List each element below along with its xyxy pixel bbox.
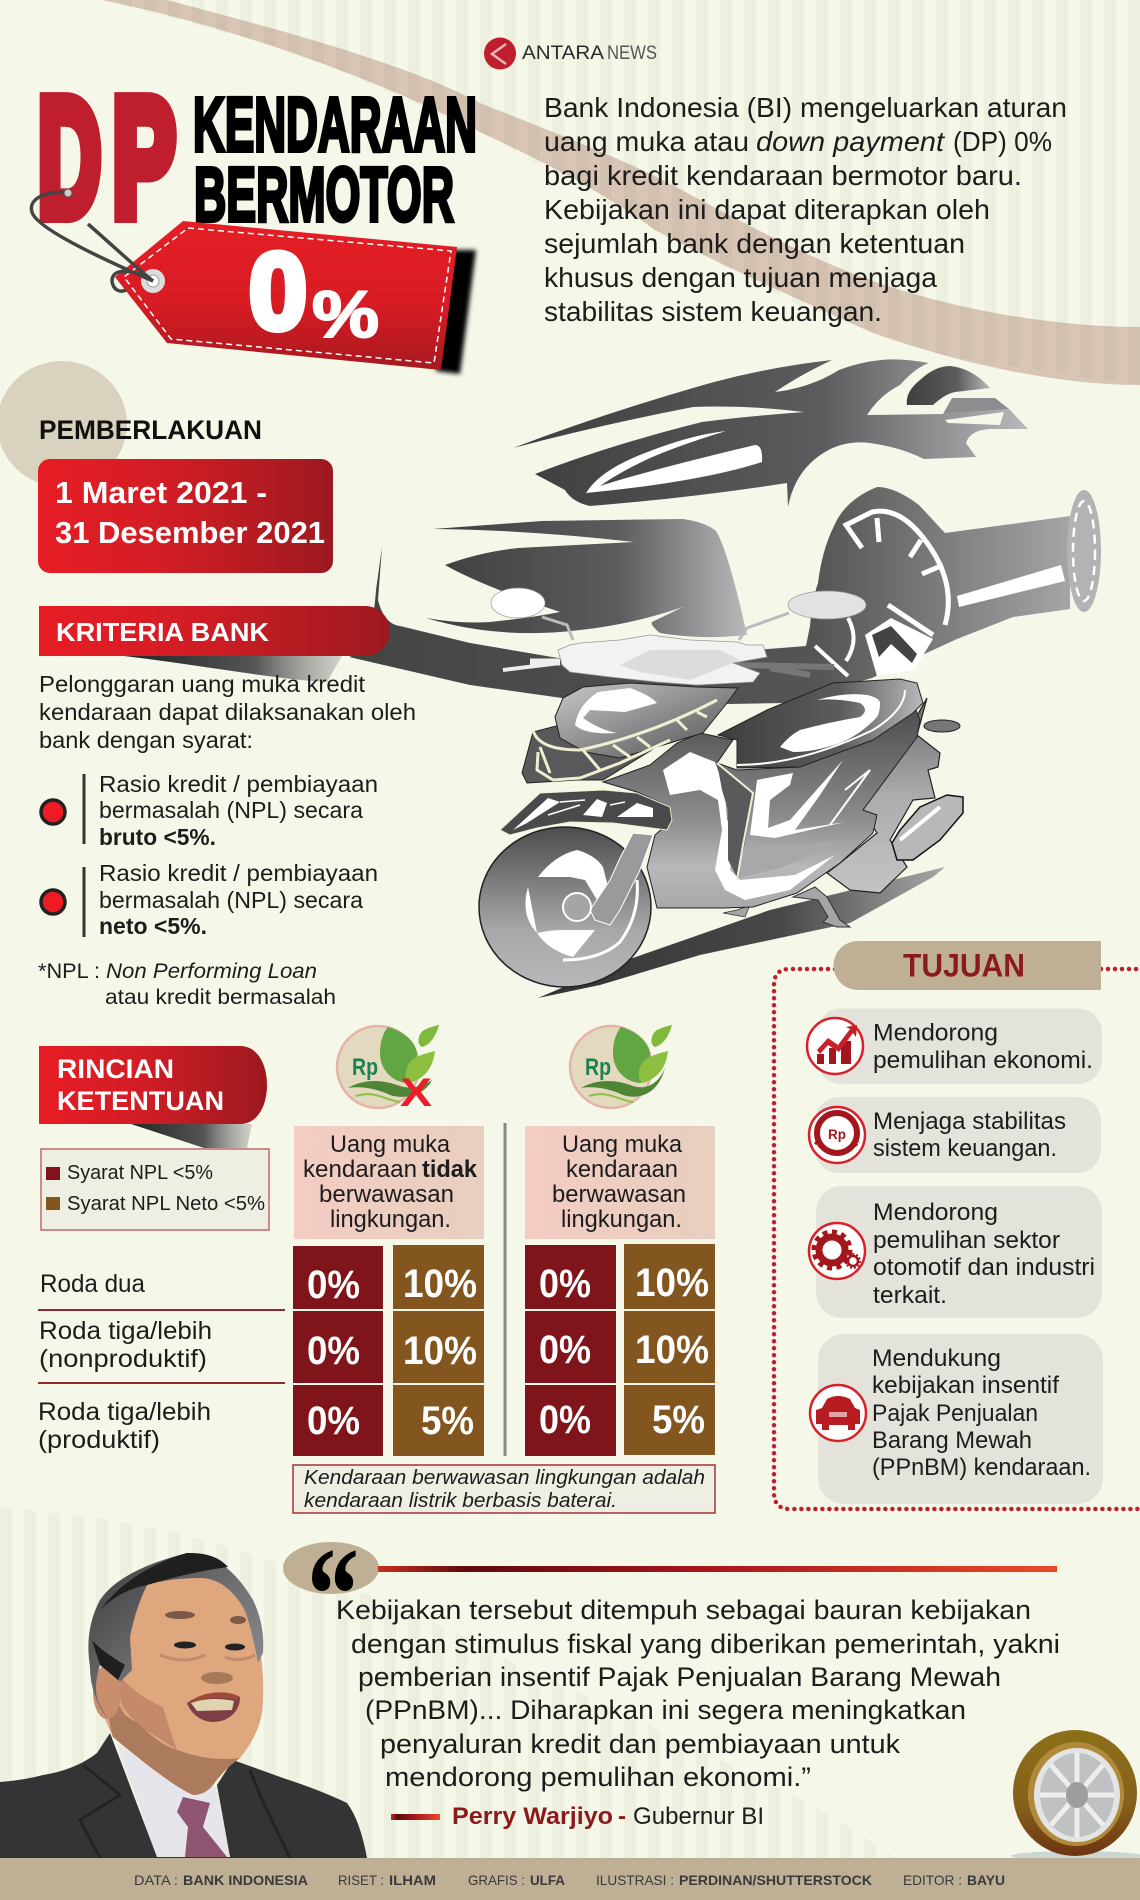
heading: pemberlakuan: PEMBERLAKUAN — [39, 415, 262, 445]
heading: rincian ketentuan: RINCIAN — [57, 1054, 174, 1084]
intro text: Bank Indonesia (BI) mengeluarkan aturan — [544, 92, 1067, 123]
column header: berwawasan lingkungan — [525, 1126, 715, 1239]
legend: Syarat NPL <5% — [67, 1162, 213, 1184]
criterion: neto: Rasio kredit / pembiayaan — [99, 860, 378, 886]
heading: tujuan: TUJUAN — [903, 948, 1025, 984]
data table: eco-friendly: 0% — [539, 1262, 591, 1306]
title: BERMOTOR — [194, 152, 454, 238]
row label: roda tiga produktif: (produktif) — [38, 1426, 160, 1454]
goal: sektor otomotif: otomotif dan industri — [873, 1254, 1095, 1281]
stand — [723, 887, 850, 927]
goal: stabilitas keuangan: Rp — [828, 1126, 846, 1142]
date panel: 31 Desember 2021 — [55, 515, 325, 550]
column header: berwawasan lingkungan: kendaraan — [566, 1156, 678, 1183]
date panel — [38, 459, 333, 573]
data table: not eco-friendly: 0% — [307, 1399, 360, 1443]
footer credits: ILHAM — [389, 1872, 436, 1888]
footnote NPL: *NPL : — [38, 960, 100, 983]
quote text — [336, 1595, 1060, 1792]
goal: insentif PPnBM: (PPnBM) kendaraan. — [872, 1454, 1091, 1481]
intro paragraph — [39, 671, 416, 753]
data table: eco-friendly: 10% — [635, 1261, 709, 1305]
panel: tujuan — [774, 941, 1140, 1509]
handlebar — [491, 588, 866, 685]
attribution — [391, 1803, 764, 1830]
intro text: stabilitas sistem keuangan. — [544, 296, 882, 327]
price tag 0%: 0 — [249, 230, 307, 352]
column header: berwawasan lingkungan: lingkungan. — [561, 1206, 682, 1233]
data table: not eco-friendly: 0% — [307, 1329, 360, 1373]
panel: kriteria bank — [38, 606, 416, 1009]
data table: eco-friendly: 5% — [652, 1398, 705, 1442]
goal: pemulihan ekonomi: pemulihan ekonomi. — [873, 1047, 1093, 1074]
title — [38, 65, 477, 251]
column header: tidak berwawasan lingkungan: berwawasan — [319, 1181, 454, 1208]
data table: not eco-friendly: 5% — [421, 1399, 474, 1443]
column header: tidak berwawasan lingkungan — [294, 1126, 484, 1239]
column header: tidak berwawasan lingkungan: tidak — [422, 1156, 478, 1183]
footer credits: GRAFIS : — [468, 1872, 525, 1888]
intro text — [544, 92, 1067, 327]
title: D — [38, 65, 101, 251]
row label: roda tiga nonproduktif: (nonproduktif) — [39, 1345, 207, 1373]
criterion: bruto — [41, 771, 378, 850]
intro text: sejumlah bank dengan ketentuan — [544, 228, 965, 259]
title: KENDARAAN — [193, 82, 477, 168]
heading: rincian ketentuan: KETENTUAN — [57, 1086, 224, 1116]
background swoosh band — [102, 0, 1140, 385]
intro text: bagi kredit kendaraan bermotor baru. — [544, 160, 1022, 191]
fairing — [522, 683, 738, 783]
intro text: Kebijakan ini dapat diterapkan oleh — [544, 194, 990, 225]
intro text: uang muka atau — [544, 126, 749, 157]
logo: Antara News: ANTARA — [522, 43, 604, 64]
quote text: dengan stimulus fiskal yang diberikan pemerintah, yakni — [351, 1629, 1060, 1659]
goal: insentif PPnBM: kebijakan insentif — [872, 1372, 1059, 1399]
quote text: Kebijakan tersebut ditempuh sebagai bauran kebijakan — [336, 1595, 1031, 1625]
goal: sektor otomotif — [809, 1186, 1102, 1318]
logo: Antara News: NEWS — [607, 43, 657, 64]
criterion: bruto: bruto <5%. — [99, 824, 216, 850]
quote mark: “ — [307, 1521, 359, 1670]
criterion: neto — [41, 860, 378, 939]
criterion: bruto: bermasalah (NPL) secara — [99, 797, 364, 823]
footnote NPL: atau kredit bermasalah — [105, 986, 336, 1009]
seat — [718, 679, 923, 768]
icon: eco rupiah: Rp — [585, 1054, 611, 1081]
attribution: - — [618, 1803, 626, 1830]
data table: not eco-friendly — [293, 1245, 484, 1456]
footer credits — [0, 1858, 1140, 1900]
attribution: Gubernur BI — [633, 1803, 764, 1830]
engine and rear tire — [827, 698, 940, 893]
goal: stabilitas keuangan: sistem keuangan. — [873, 1135, 1057, 1162]
intro text: (DP) 0% — [953, 126, 1052, 157]
scooter body — [603, 703, 920, 908]
logo: Antara News — [484, 38, 657, 70]
heading: kriteria bank — [39, 606, 390, 682]
footer credits: BAYU — [967, 1872, 1005, 1888]
price tag 0%: % — [312, 277, 379, 351]
road swoosh and big wheel — [349, 487, 1101, 704]
goal: insentif PPnBM — [810, 1334, 1103, 1504]
quote rule — [378, 1566, 1057, 1572]
quote text: penyaluran kredit dan pembiayaan untuk — [380, 1729, 901, 1759]
footer credits: EDITOR : — [903, 1872, 962, 1888]
column header: berwawasan lingkungan: Uang muka — [562, 1131, 683, 1158]
intro paragraph: bank dengan syarat: — [39, 727, 253, 753]
data table: not eco-friendly: 10% — [403, 1262, 477, 1306]
goal: sektor otomotif: Mendorong — [873, 1199, 998, 1226]
data table: eco-friendly: 0% — [539, 1328, 591, 1372]
footnote NPL — [38, 960, 336, 1009]
icon: tire — [1011, 1730, 1140, 1861]
price tag 0% — [31, 189, 476, 374]
icon: eco rupiah crossed — [337, 1025, 439, 1115]
heading: rincian ketentuan — [39, 1046, 267, 1148]
rear streak shape — [426, 519, 747, 637]
column header: tidak berwawasan lingkungan: Uang muka — [330, 1131, 451, 1158]
criterion: neto: neto <5%. — [99, 913, 207, 939]
note: definition of eco-friendly vehicle — [293, 1465, 715, 1513]
front fender — [500, 790, 672, 835]
heading: tujuan — [834, 941, 1101, 990]
goal: insentif PPnBM: Pajak Penjualan — [872, 1400, 1038, 1427]
quote text: pemberian insentif Pajak Penjualan Barang Mewah — [358, 1662, 1001, 1692]
attribution: Perry Warjiyo — [452, 1803, 613, 1830]
row label: roda tiga produktif — [38, 1398, 211, 1454]
icon: eco rupiah — [570, 1025, 672, 1108]
goal: sektor otomotif: pemulihan sektor — [873, 1227, 1060, 1254]
footer credits: BANK INDONESIA — [183, 1872, 308, 1888]
quote text: (PPnBM)... Diharapkan ini segera meningkatkan — [365, 1695, 966, 1725]
row label: roda tiga produktif: Roda tiga/lebih — [38, 1398, 211, 1426]
footnote NPL: Non Performing Loan — [106, 960, 317, 983]
data table: not eco-friendly: 0% — [307, 1263, 360, 1307]
footer credits: ILUSTRASI : — [596, 1872, 674, 1888]
column header: tidak berwawasan lingkungan: kendaraan — [303, 1156, 417, 1183]
data table: eco-friendly: 0% — [539, 1398, 591, 1442]
decorative circle behind pemberlakuan — [0, 361, 127, 487]
goal: stabilitas keuangan: Menjaga stabilitas — [873, 1108, 1066, 1135]
quote text: mendorong pemulihan ekonomi.” — [385, 1762, 811, 1792]
data table: eco-friendly: 10% — [635, 1328, 709, 1372]
goal: sektor otomotif: terkait. — [873, 1282, 947, 1309]
intro paragraph: kendaraan dapat dilaksanakan oleh — [39, 699, 416, 725]
column header: berwawasan lingkungan: berwawasan — [552, 1181, 686, 1208]
data table: not eco-friendly: 10% — [403, 1329, 477, 1373]
footer credits: DATA : — [134, 1872, 178, 1888]
criterion: neto: bermasalah (NPL) secara — [99, 887, 364, 913]
row label: roda tiga nonproduktif — [39, 1317, 212, 1373]
footer credits: ULFA — [530, 1872, 565, 1888]
goal: pemulihan ekonomi — [807, 1008, 1102, 1084]
row label: roda dua: Roda dua — [40, 1270, 145, 1298]
footer credits: RISET : — [338, 1872, 384, 1888]
panel: rincian ketentuan — [38, 1025, 715, 1513]
heading: kriteria bank: KRITERIA BANK — [56, 617, 269, 647]
goal: insentif PPnBM: Mendukung — [872, 1345, 1001, 1372]
car streak shape — [513, 359, 1028, 507]
criterion: bruto: Rasio kredit / pembiayaan — [99, 771, 378, 797]
data table: eco-friendly — [525, 1244, 715, 1456]
goal: pemulihan ekonomi: Mendorong — [873, 1020, 998, 1046]
icon: eco rupiah crossed: X — [400, 1071, 432, 1115]
intro paragraph: Pelonggaran uang muka kredit — [39, 671, 365, 697]
column header: tidak berwawasan lingkungan: lingkungan. — [330, 1206, 451, 1233]
muffler — [892, 720, 963, 860]
icon: eco rupiah crossed: Rp — [352, 1054, 378, 1081]
front wheel — [479, 827, 653, 987]
legend — [41, 1149, 269, 1230]
date panel: 1 Maret 2021 - — [55, 475, 267, 510]
portrait: Perry Warjiyo — [0, 1553, 367, 1858]
goal: insentif PPnBM: Barang Mewah — [872, 1427, 1032, 1454]
legend: Syarat NPL Neto <5% — [67, 1193, 265, 1215]
footer credits: PERDINAN/SHUTTERSTOCK — [679, 1872, 872, 1888]
intro text: khusus dengan tujuan menjaga — [544, 262, 938, 293]
goal: stabilitas keuangan — [809, 1097, 1101, 1173]
note: definition of eco-friendly vehicle: Kendaraan berwawasan lingkungan adalah — [304, 1467, 705, 1489]
title: P — [112, 65, 176, 251]
illustration: car silhouette and scooter — [349, 359, 1101, 998]
note: definition of eco-friendly vehicle: kendaraan listrik berbasis baterai. — [304, 1490, 617, 1512]
intro text: down payment — [756, 126, 945, 157]
row label: roda tiga nonproduktif: Roda tiga/lebih — [39, 1317, 212, 1345]
shadow under scooter — [538, 867, 945, 998]
